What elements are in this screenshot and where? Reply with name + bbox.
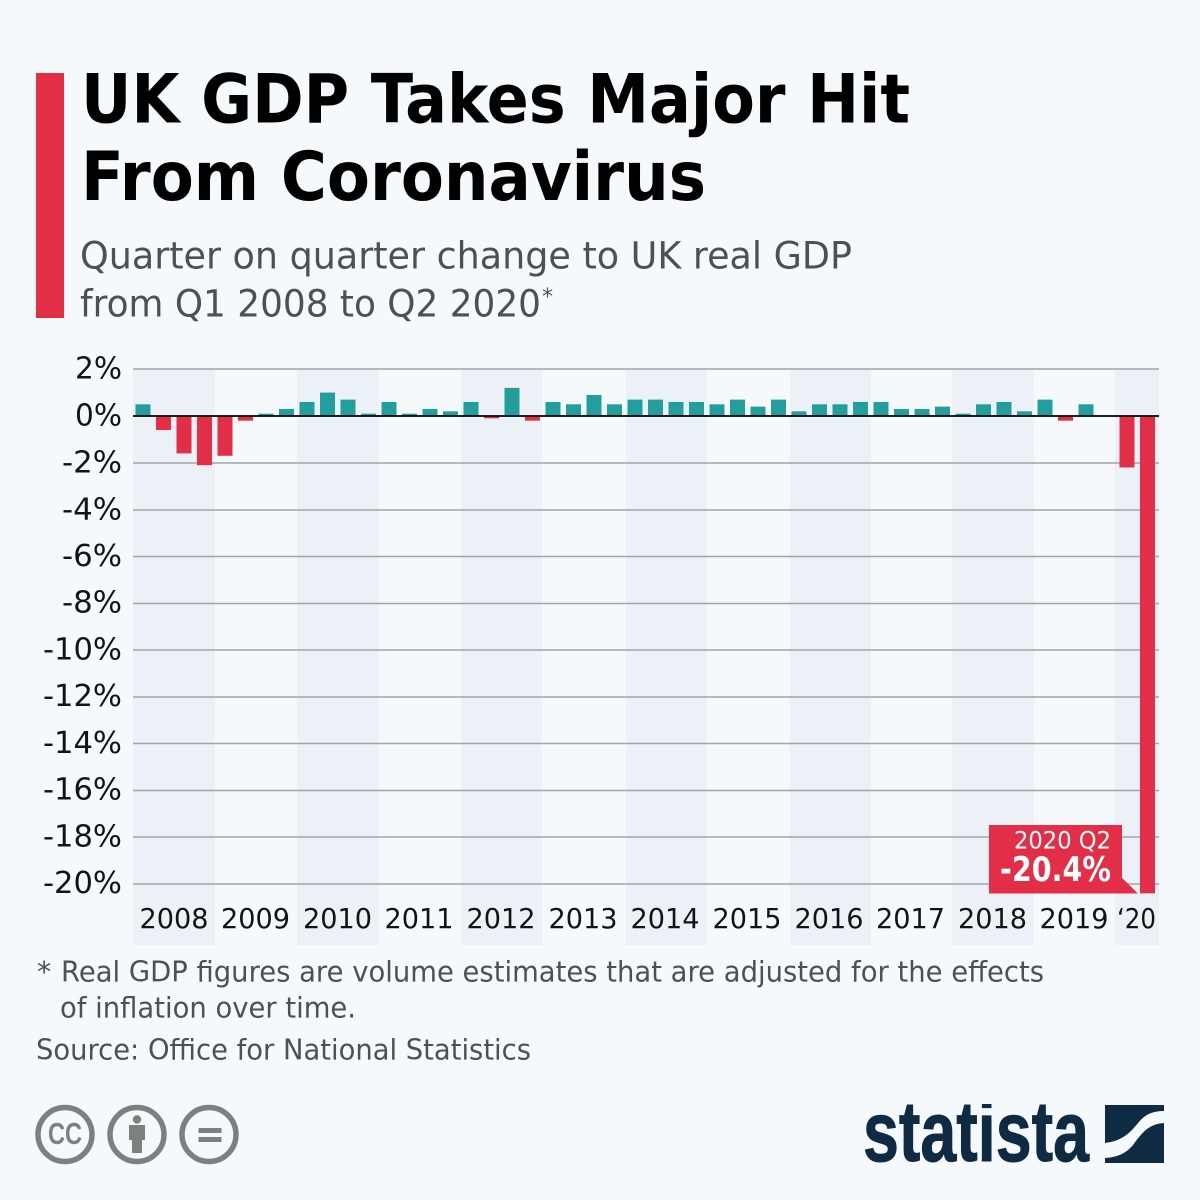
y axis labels: -12% bbox=[43, 679, 122, 714]
y axis labels: -4% bbox=[62, 492, 122, 528]
icon: creative commons: CC bbox=[48, 1116, 82, 1151]
x axis year labels bbox=[140, 903, 1156, 935]
chart: alternating year bands bbox=[133, 369, 1159, 945]
x axis year labels: 2013 bbox=[548, 903, 618, 935]
x axis year labels: 2014 bbox=[630, 903, 700, 935]
y axis labels bbox=[43, 352, 122, 901]
footnote: of inflation over time. bbox=[60, 992, 356, 1024]
icon: attribution bbox=[110, 1108, 164, 1162]
y axis labels: -16% bbox=[43, 772, 122, 808]
x axis year labels: 2017 bbox=[876, 903, 945, 935]
x axis year labels: 2009 bbox=[221, 903, 290, 935]
y axis labels: -10% bbox=[43, 632, 122, 668]
icon: creative commons bbox=[38, 1108, 92, 1162]
y axis labels: -18% bbox=[43, 820, 122, 854]
x axis year labels: 2008 bbox=[140, 903, 208, 935]
callout: 2020 Q2 value: 2020 Q2 bbox=[1014, 826, 1111, 854]
accent bar bbox=[36, 73, 64, 318]
subtitle bbox=[80, 234, 852, 326]
subtitle: Quarter on quarter change to UK real GDP bbox=[80, 234, 852, 278]
title bbox=[81, 60, 910, 217]
x axis year labels: 2010 bbox=[303, 903, 372, 935]
statista logo: statista bbox=[863, 1085, 1090, 1180]
callout: 2020 Q2 value: -20.4% bbox=[1000, 850, 1111, 890]
footnote: Real GDP figures are volume estimates that are adjusted for the effects bbox=[61, 956, 1044, 988]
y axis labels: -8% bbox=[62, 586, 122, 620]
footnote bbox=[37, 956, 1044, 1024]
title: UK GDP Takes Major Hit bbox=[81, 60, 910, 140]
y axis labels: 0% bbox=[75, 398, 122, 434]
x axis year labels: 2012 bbox=[466, 903, 536, 935]
source: Source: Office for National Statistics bbox=[36, 1034, 531, 1066]
footnote: * bbox=[37, 956, 51, 988]
y axis labels: -6% bbox=[62, 539, 122, 574]
x axis year labels: 2015 bbox=[712, 903, 782, 935]
y axis labels: -2% bbox=[62, 446, 122, 480]
x axis year labels: 2018 bbox=[958, 903, 1027, 935]
x axis year labels: 2016 bbox=[794, 903, 864, 935]
x axis year labels: 2011 bbox=[384, 903, 454, 935]
y axis labels: -14% bbox=[43, 726, 122, 761]
title: From Coronavirus bbox=[81, 138, 706, 217]
subtitle: from Q1 2008 to Q2 2020 bbox=[80, 282, 541, 326]
icon: no derivatives bbox=[182, 1108, 236, 1162]
x axis year labels: ‘20 bbox=[1117, 903, 1156, 935]
callout: 2020 Q2 value bbox=[989, 825, 1138, 894]
bars: quarterly GDP change bbox=[136, 388, 1155, 893]
x axis year labels: 2019 bbox=[1040, 903, 1108, 935]
zero line bbox=[133, 415, 1159, 417]
y axis labels: 2% bbox=[75, 352, 122, 386]
subtitle: * bbox=[542, 285, 553, 310]
statista logo bbox=[864, 1104, 1164, 1163]
y axis labels: -20% bbox=[43, 866, 122, 901]
